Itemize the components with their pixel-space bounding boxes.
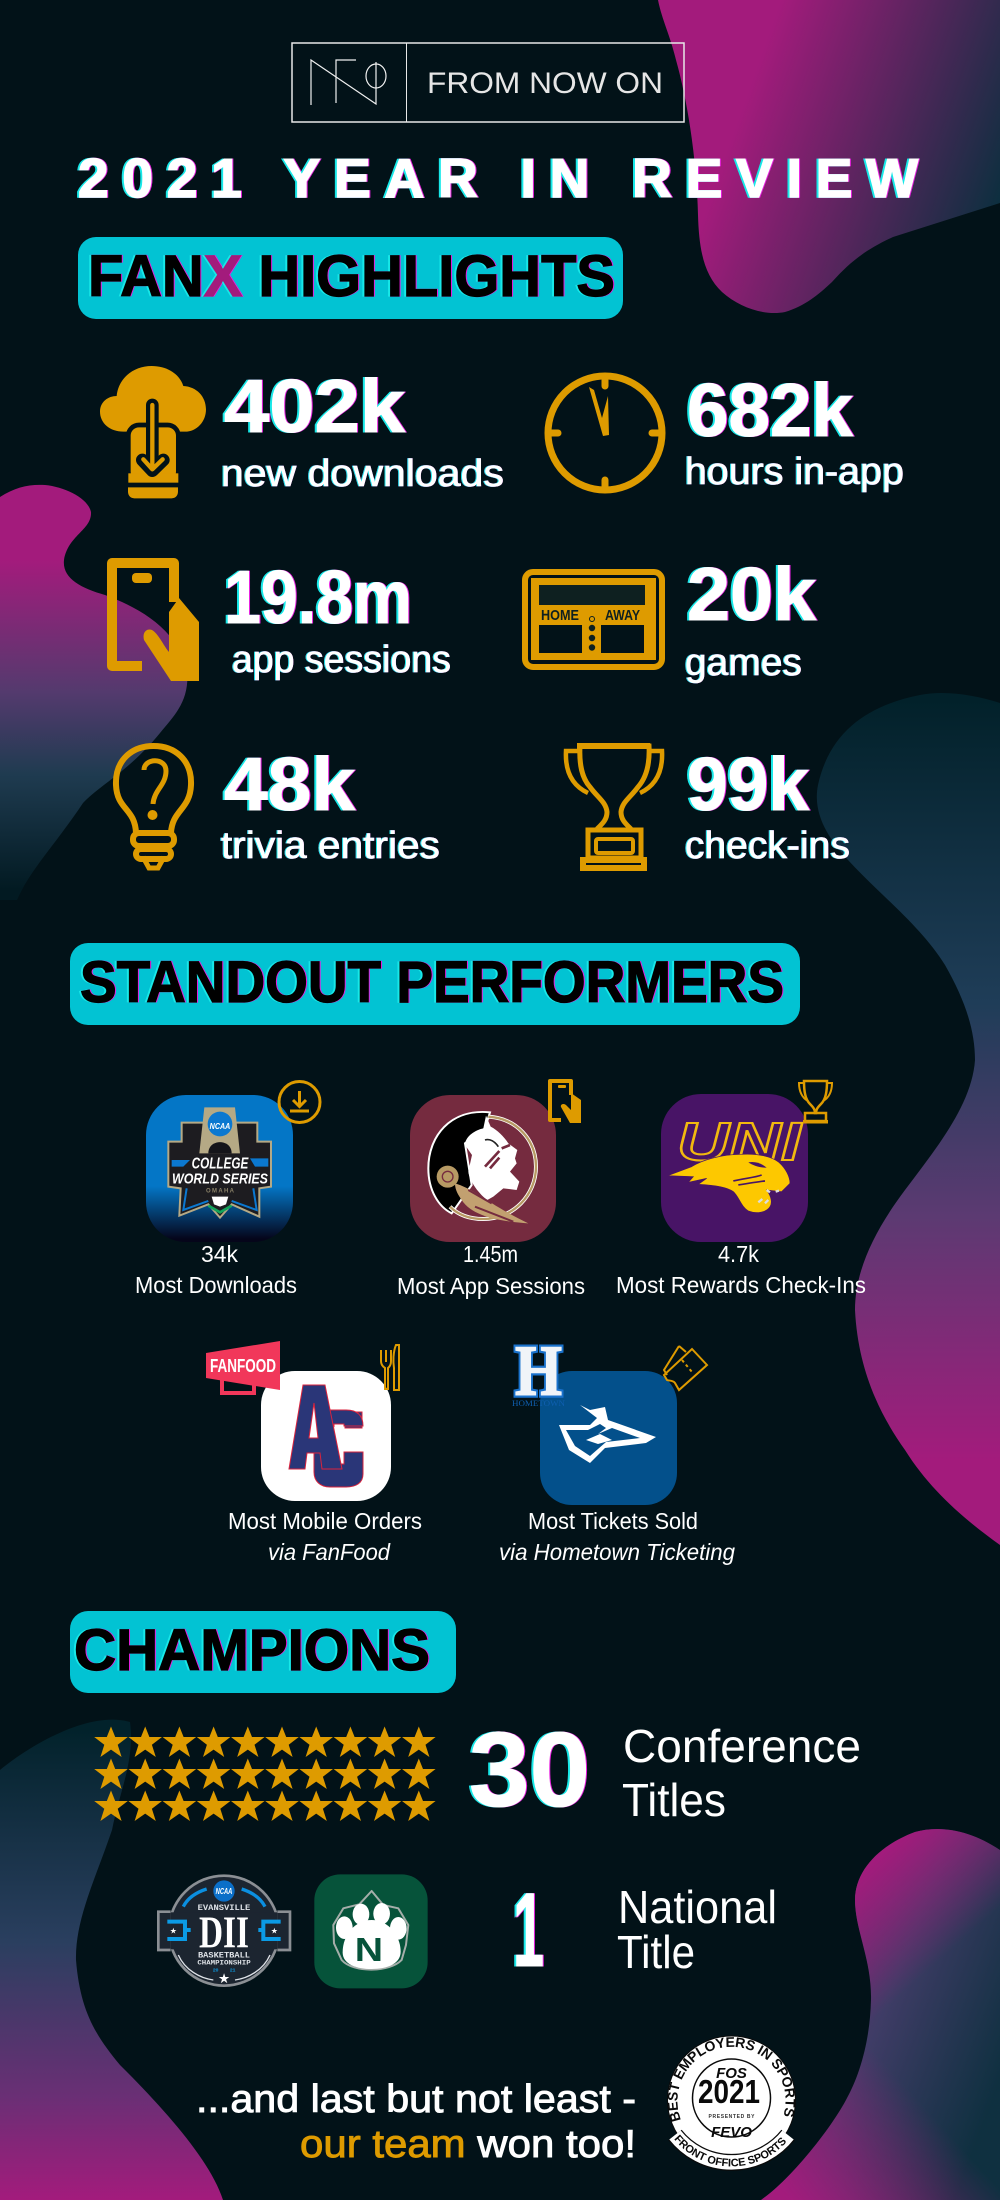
stat: trivia entries: trivia entries xyxy=(221,825,440,867)
app icon: College World Series: WORLD SERIES xyxy=(172,1172,268,1188)
title: 2021 YEAR IN REVIEW xyxy=(78,147,918,209)
logo: Hometown Ticketing: HOMETOWN xyxy=(512,1399,565,1408)
performer: Florida State xyxy=(397,1081,585,1299)
badge: FOS Best Employers in Sports 2021: BEST EMPLOYERS IN SPORTS xyxy=(668,2037,795,2122)
heading: Standout Performers: STANDOUT PERFORMERS xyxy=(80,950,784,1015)
logo: DII Basketball Championship: DII xyxy=(199,1908,249,1958)
background blob: bottom right xyxy=(761,1829,1000,2200)
performer: Assumption / Mobile Orders: via FanFood xyxy=(268,1539,391,1565)
logo: Hometown Ticketing: H xyxy=(515,1331,562,1411)
closing text xyxy=(196,2078,636,2166)
stat: app sessions: 19.8m xyxy=(224,555,412,639)
icon: trophy xyxy=(566,743,662,871)
performer: Northern Iowa xyxy=(616,1081,866,1298)
icon: ticket xyxy=(664,1346,707,1390)
stat: conference titles: 30 xyxy=(469,1711,590,1829)
logo: DII Basketball Championship: ★ xyxy=(170,1927,177,1936)
performer: Northern Iowa: 4.7k xyxy=(718,1241,759,1267)
logo: DII Basketball Championship xyxy=(158,1876,290,1986)
app icon: Florida State xyxy=(410,1095,556,1242)
stat: new downloads: 402k xyxy=(224,364,405,448)
stat: check-ins xyxy=(566,742,850,871)
app icon: Northwest Bearcats paw: N xyxy=(355,1932,383,1969)
logo: DII Basketball Championship: BASKETBALL xyxy=(198,1952,250,1961)
stat: games xyxy=(525,552,816,684)
stat: national title xyxy=(158,1872,777,1989)
stat: hours in-app: 682k xyxy=(687,368,853,452)
performer: College World Series: 34k xyxy=(201,1241,238,1267)
stat: check-ins: check-ins xyxy=(685,825,850,867)
closing text: our team won too! xyxy=(300,2123,636,2166)
app icon: AC xyxy=(261,1371,391,1501)
stat: check-ins: 99k xyxy=(687,742,809,826)
stat: national title: National xyxy=(618,1881,777,1933)
stat: national title: 1 xyxy=(513,1872,544,1989)
logo: From Now On xyxy=(292,43,684,122)
app icon: College World Series xyxy=(146,1095,293,1242)
badge: FOS Best Employers in Sports 2021: FOS xyxy=(716,2065,747,2082)
performer: Assumption / Mobile Orders: Most Mobile Orders xyxy=(228,1508,422,1534)
icon: phone badge xyxy=(550,1081,581,1123)
performer: Northern Iowa: Most Rewards Check-Ins xyxy=(616,1272,866,1298)
app icon: Northwest Bearcats paw xyxy=(314,1874,428,1988)
app icon: College World Series: NCAA xyxy=(210,1121,230,1131)
logo: DII Basketball Championship: ★ xyxy=(218,1971,230,1986)
badge: FOS Best Employers in Sports 2021: FEVO xyxy=(711,2124,752,2141)
app icon: College World Series: COLLEGE xyxy=(192,1155,249,1172)
heading: FanX Highlights: FANX HIGHLIGHTS xyxy=(88,244,615,309)
background blob: bottom left xyxy=(0,1720,223,2200)
icon: fork and knife xyxy=(381,1345,399,1390)
icon: hand holding phone xyxy=(112,563,199,681)
icon: thirty stars xyxy=(94,1726,436,1821)
logo: DII Basketball Championship: 20 xyxy=(213,1968,219,1974)
performer: College World Series: Most Downloads xyxy=(135,1272,297,1298)
stat: conference titles: Conference xyxy=(623,1720,861,1772)
icon: scoreboard: HOME xyxy=(541,607,579,624)
performer: Nebraska Kearney / Tickets Sold xyxy=(499,1331,735,1565)
logo: DII Basketball Championship: CHAMPIONSHIP xyxy=(197,1959,251,1966)
stat: new downloads: new downloads xyxy=(221,453,504,495)
background blob: top right xyxy=(658,0,1000,313)
performer: Florida State: 1.45m xyxy=(463,1241,518,1267)
stat: trivia entries xyxy=(116,742,440,868)
app icon: College World Series: OMAHA xyxy=(206,1188,235,1194)
performer: Florida State: Most App Sessions xyxy=(397,1273,585,1299)
stat: games: 20k xyxy=(687,552,816,636)
heading: Champions: CHAMPIONS xyxy=(74,1618,430,1683)
performer: Assumption / Mobile Orders xyxy=(206,1341,422,1565)
badge: FOS Best Employers in Sports 2021: 2021 xyxy=(698,2073,760,2110)
icon: FanFood megaphone xyxy=(206,1341,280,1393)
stat: conference titles: Titles xyxy=(622,1774,726,1826)
icon: question light bulb xyxy=(116,746,191,868)
background blob: right xyxy=(817,693,1000,1545)
icon: download badge xyxy=(279,1082,320,1122)
stat: app sessions xyxy=(112,555,451,681)
logo: DII Basketball Championship: ★ xyxy=(271,1927,278,1936)
stat: app sessions: app sessions xyxy=(232,639,451,681)
background blob: left xyxy=(0,485,187,900)
stat: national title: Title xyxy=(617,1926,695,1978)
icon: cloud download to phone xyxy=(100,366,206,498)
stat: trivia entries: 48k xyxy=(224,742,355,826)
stat: conference titles xyxy=(94,1711,861,1829)
logo: Hometown Ticketing: H xyxy=(515,1331,562,1411)
stat: games: games xyxy=(685,642,802,684)
closing text: ...and last but not least - xyxy=(196,2078,636,2121)
logo: From Now On: FROM NOW ON xyxy=(427,67,663,100)
icon: FanFood megaphone: FANFOOD xyxy=(210,1356,276,1376)
performer: Nebraska Kearney / Tickets Sold: Most Tickets Sold xyxy=(528,1508,698,1534)
logo: DII Basketball Championship: NCAA xyxy=(216,1887,232,1896)
stat: hours in-app: hours in-app xyxy=(685,451,904,493)
performer: Nebraska Kearney / Tickets Sold: via Hometown Ticketing xyxy=(499,1539,735,1565)
icon: clock xyxy=(548,376,662,490)
stat: hours in-app xyxy=(548,368,904,493)
badge: FOS Best Employers in Sports 2021: FRONT OFFICE SPORTS xyxy=(674,2134,786,2166)
icon: small trophy xyxy=(799,1081,832,1124)
app icon: wolf xyxy=(540,1371,677,1505)
icon: scoreboard: AWAY xyxy=(605,607,640,624)
icon: scoreboard xyxy=(525,572,662,667)
stat: new downloads xyxy=(100,364,504,498)
badge: FOS Best Employers in Sports 2021 xyxy=(667,2036,796,2171)
app icon: Northern Iowa: UNI xyxy=(677,1113,803,1172)
performer: College World Series xyxy=(135,1082,320,1298)
logo: DII Basketball Championship: 21 xyxy=(230,1968,236,1974)
app icon: Northern Iowa xyxy=(661,1094,808,1242)
logo: DII Basketball Championship: EVANSVILLE xyxy=(198,1904,251,1913)
badge: FOS Best Employers in Sports 2021: PRESENTED BY xyxy=(708,2114,755,2120)
